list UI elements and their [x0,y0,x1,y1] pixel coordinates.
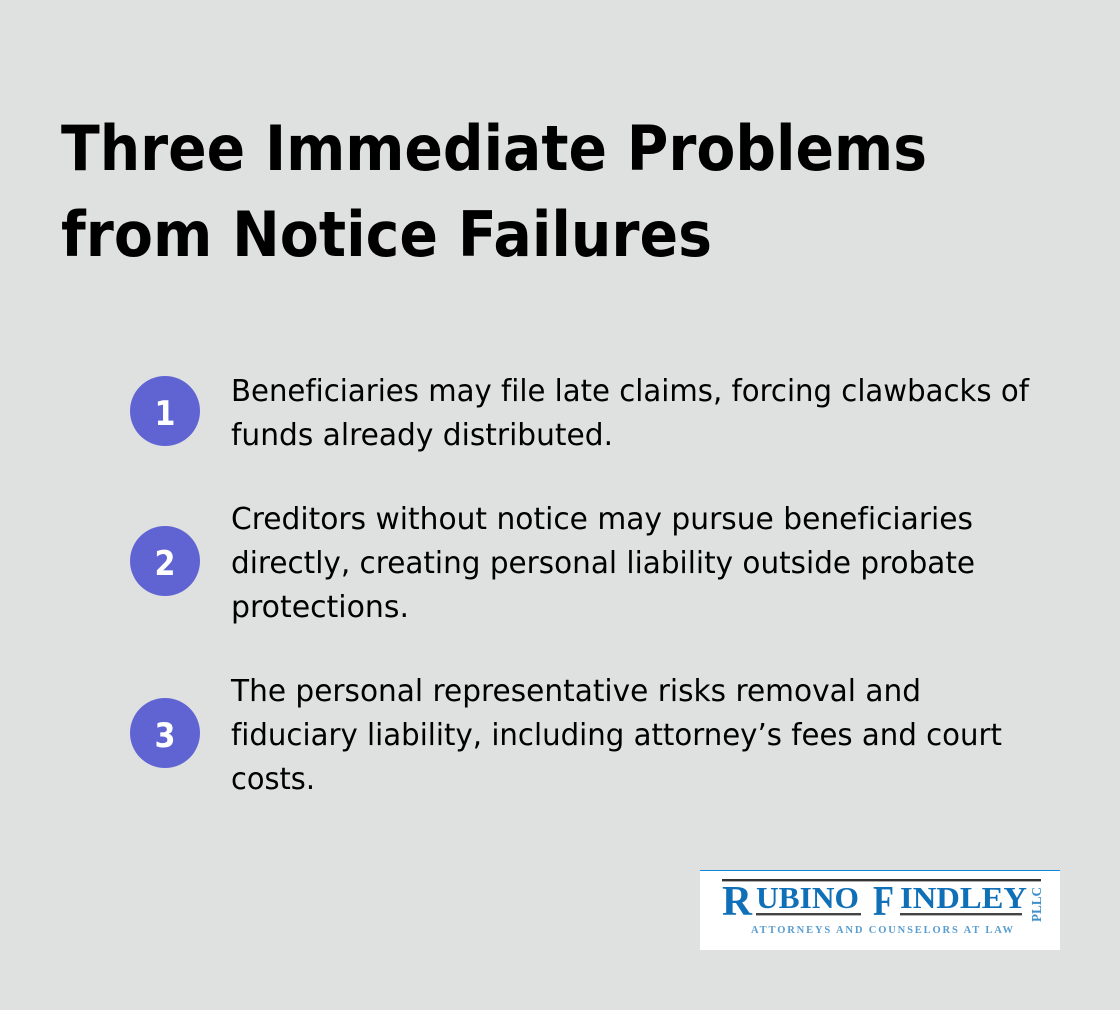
logo: Rubino Findley PLLC: PLLC [1030,887,1045,922]
text: item 2: protections. [231,590,409,625]
logo: Rubino Findley PLLC: UBINO [756,880,859,915]
title: Three Immediate Problems [61,112,927,185]
text: item 2: Creditors without notice may pursue beneficiaries [231,502,973,537]
text: item 3: costs. [231,762,315,797]
icon: number badge 2: 2 [154,544,176,584]
icon: number badge 3: 3 [154,716,176,756]
logo: Rubino Findley PLLC: F [873,879,894,925]
title: from Notice Failures [61,198,712,271]
text: item 2 [231,502,975,625]
list item 2 [130,502,975,625]
logo: Rubino Findley PLLC: R [722,879,753,925]
logo: Rubino Findley PLLC [700,870,1060,950]
title [61,112,927,271]
icon: number badge 1 [130,376,200,446]
logo: Rubino Findley PLLC: ATTORNEYS AND COUNSELORS AT LAW [751,925,1014,936]
text: item 1: funds already distributed. [231,418,613,453]
text: item 1: Beneficiaries may file late claims, forcing clawbacks of [231,374,1030,409]
text: item 3: fiduciary liability, including attorney’s fees and court [231,718,1002,753]
icon: number badge 2 [130,526,200,596]
list item 3 [130,674,1002,797]
logo: Rubino Findley PLLC: INDLEY [900,880,1027,915]
text: item 3: The personal representative risks removal and [230,674,921,709]
icon: number badge 3 [130,698,200,768]
text: item 1 [231,374,1030,453]
icon: number badge 1: 1 [154,394,176,434]
text: item 3 [230,674,1002,797]
list item 1 [130,374,1030,453]
text: item 2: directly, creating personal liability outside probate [231,546,975,581]
